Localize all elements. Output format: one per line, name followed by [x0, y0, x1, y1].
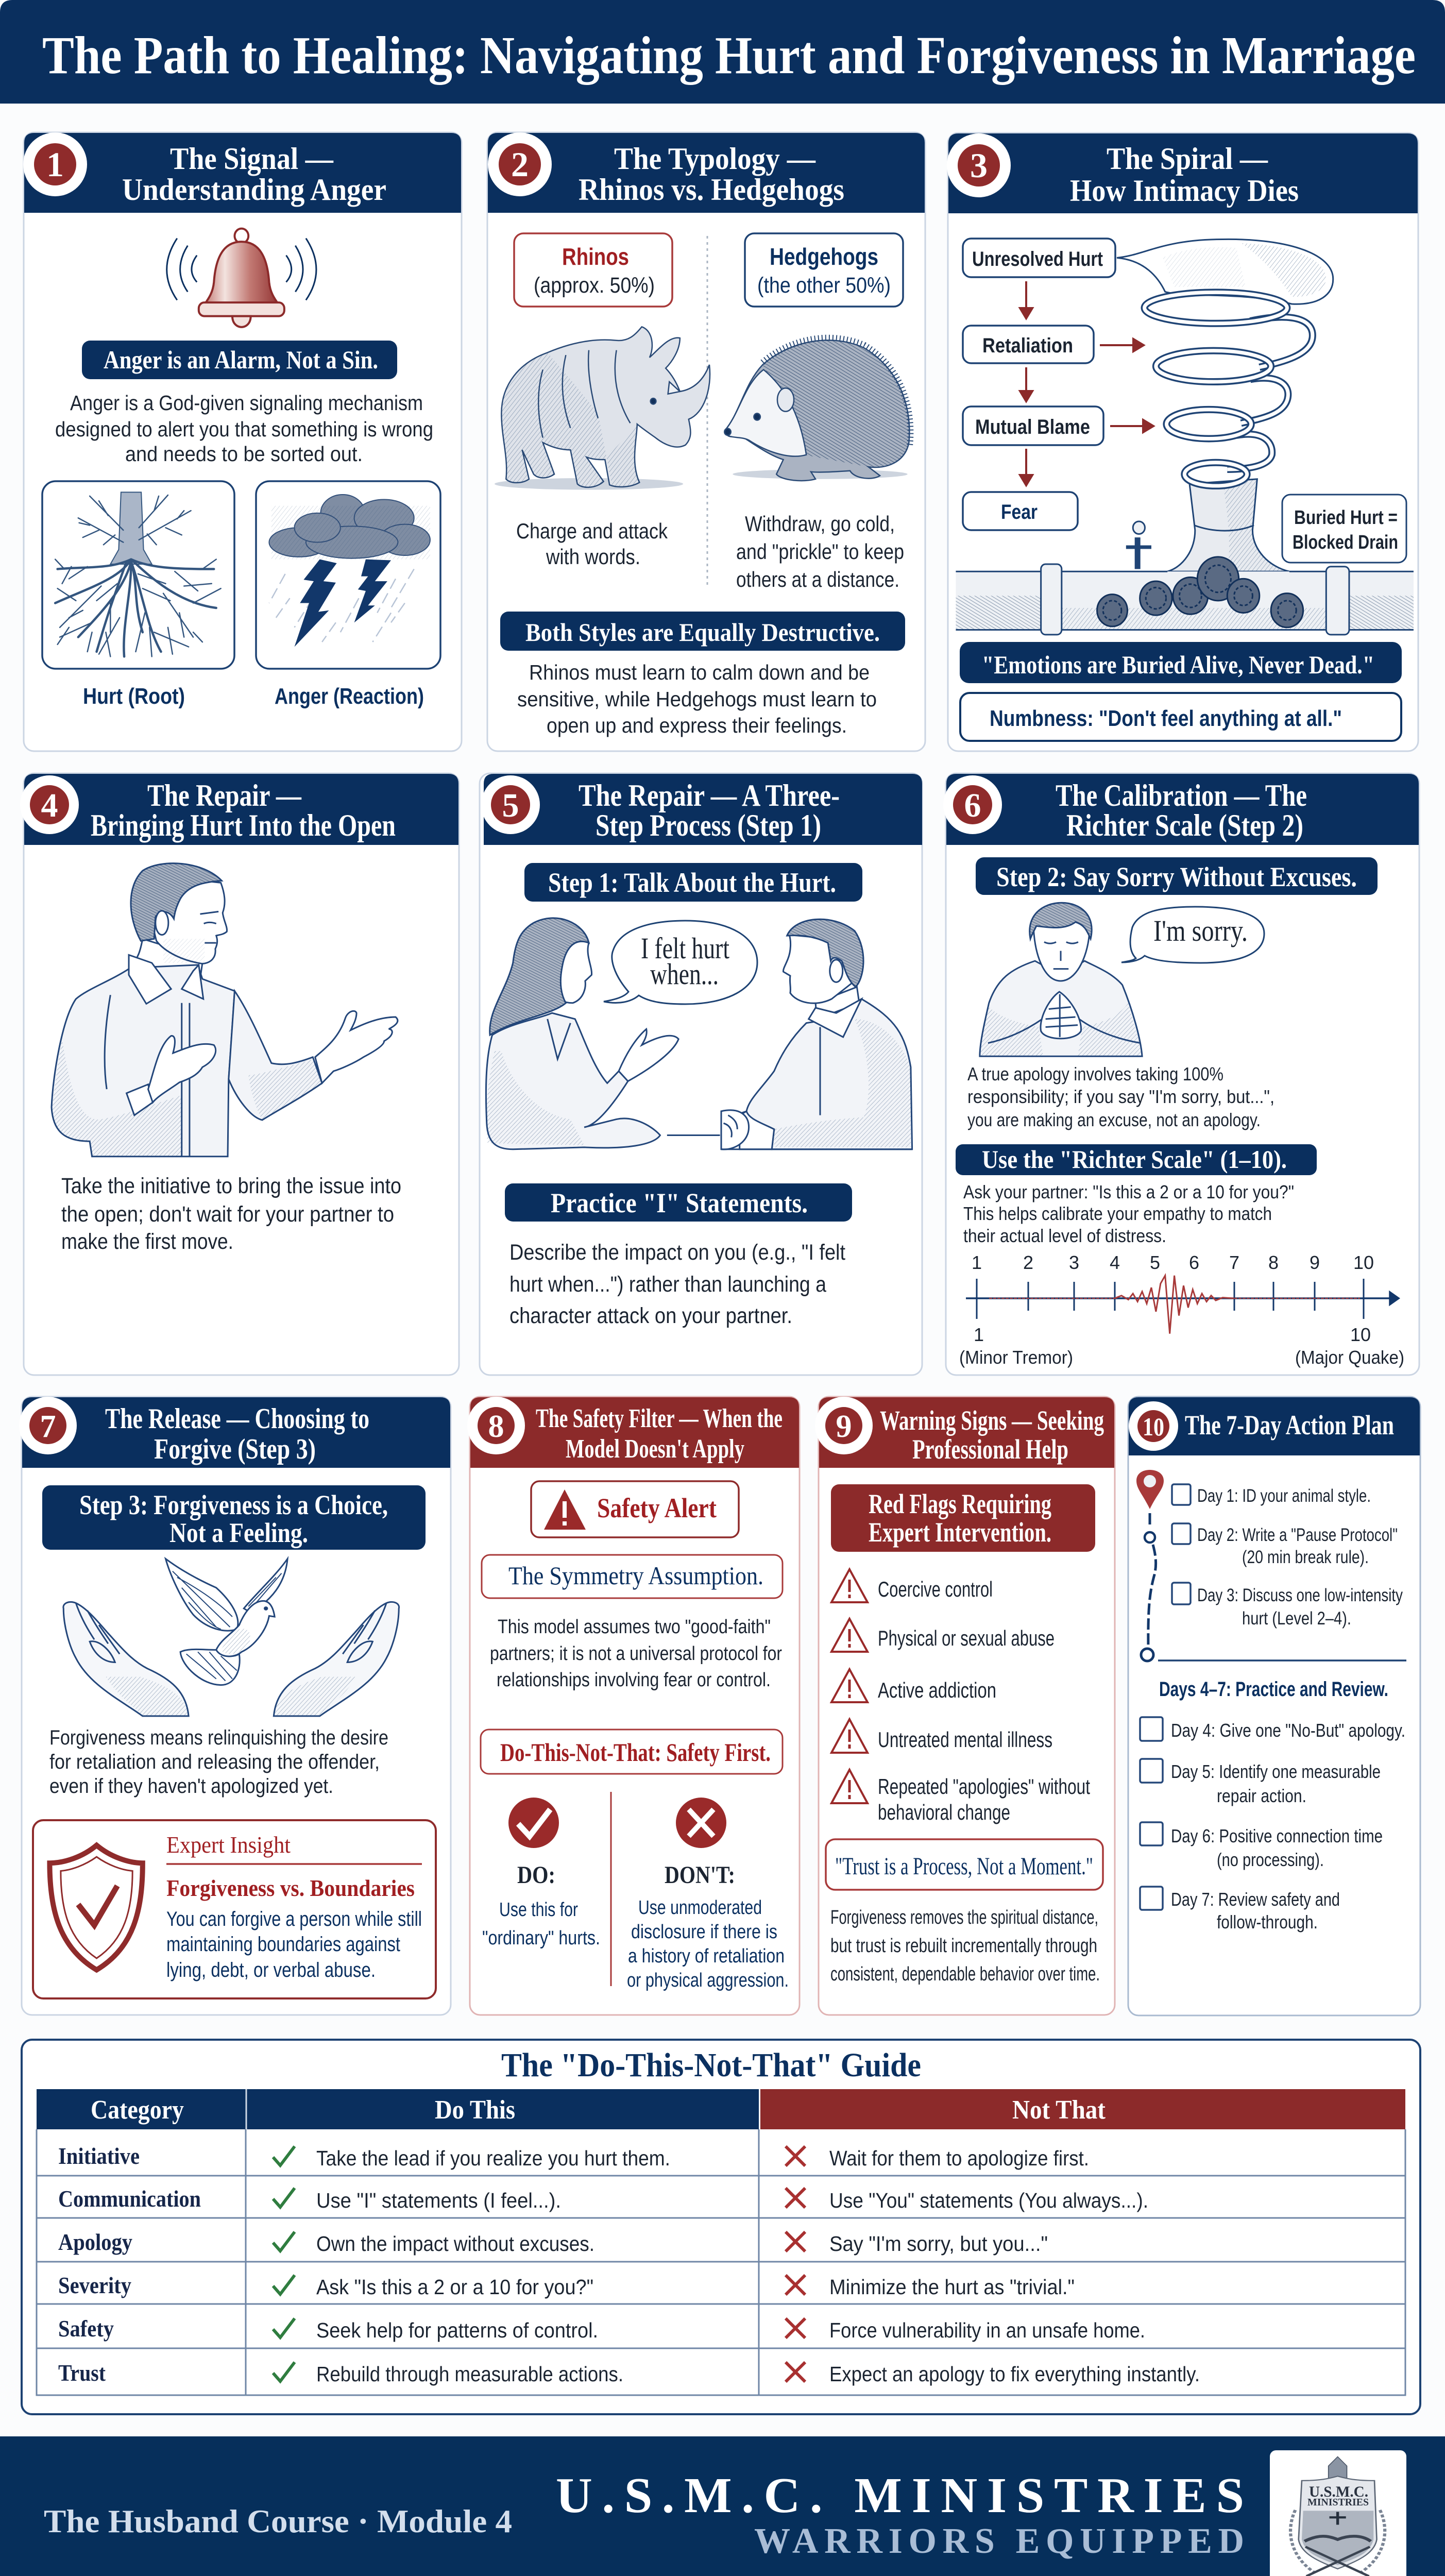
rule [1158, 1659, 1406, 1662]
label box: hedgehogs [745, 233, 903, 307]
text: anger description [55, 391, 433, 466]
callout: expert insight: You can forgive a person while still [166, 1908, 422, 1930]
panel 8 header [470, 1397, 799, 1468]
row: safety: Force vulnerability in an unsafe home. [829, 2318, 1145, 2342]
text: model assumes [490, 1616, 782, 1691]
row: apology [58, 2229, 1048, 2256]
checklist day 7: follow-through. [1217, 1911, 1318, 1933]
text: true apology: you are making an excuse, not an apology. [967, 1109, 1261, 1130]
callout: both styles [500, 612, 905, 651]
footer [0, 2436, 1445, 2576]
chart: richter scale: (Minor Tremor) [959, 1347, 1073, 1368]
label: buried hurt [1282, 495, 1406, 563]
checklist day 2: (20 min break rule). [1242, 1547, 1369, 1567]
dont column: or physical aggression. [627, 1970, 789, 1991]
row: trust: Rebuild through measurable actions. [316, 2362, 623, 2386]
row: communication [58, 2185, 1148, 2212]
dont column [627, 1861, 789, 1991]
text: forgiveness means: even if they haven't apologized yet. [49, 1775, 333, 1798]
chart: richter scale: 8 [1268, 1252, 1279, 1273]
text: ask your partner: This helps calibrate your empathy to match [963, 1203, 1272, 1224]
flag: mental illness [831, 1719, 1052, 1753]
callout: say sorry: Step 2: Say Sorry Without Excuses. [996, 861, 1357, 892]
flag: mental illness: Untreated mental illness [878, 1727, 1052, 1752]
guide heading: The "Do-This-Not-That" Guide [501, 2046, 921, 2084]
flag: active addiction: Active addiction [878, 1678, 996, 1702]
number badge 3 [947, 133, 1011, 197]
flag: repeated apologies [831, 1770, 1090, 1824]
do column: Use this for [499, 1899, 578, 1921]
flag: physical abuse: Physical or sexual abuse [878, 1626, 1055, 1650]
panel 4 header: The Repair — [147, 778, 302, 812]
callout: practice I statements: Practice "I" Statements. [551, 1188, 808, 1218]
row: initiative: Wait for them to apologize first. [829, 2146, 1089, 2170]
speech bubble: I felt hurt when: I felt hurt [641, 931, 729, 965]
number badge 10 [1129, 1401, 1178, 1451]
text: hedgehog behaviour: Withdraw, go cold, [745, 512, 895, 536]
label: hurt root: Hurt (Root) [83, 684, 185, 709]
row: apology: Apology [58, 2229, 132, 2255]
text: model assumes: relationships involving fear or control. [497, 1669, 771, 1691]
text: true apology [967, 1063, 1274, 1130]
callout: trust is a process: "Trust is a Process, Not a Moment." [835, 1853, 1093, 1880]
row: severity: Ask "Is this a 2 or a 10 for you?" [316, 2275, 593, 2299]
safety alert [531, 1481, 739, 1537]
text: both styles description: open up and express their feelings. [547, 714, 847, 737]
illustration: hands releasing dove [63, 1559, 399, 1716]
row: communication: Communication [58, 2185, 201, 2212]
chart: richter scale: 1 [972, 1252, 982, 1273]
icon: alarm bell [167, 229, 316, 327]
checklist day 5 [1140, 1759, 1381, 1806]
text: both styles description: sensitive, while Hedgehogs must learn to [517, 687, 877, 711]
chart: richter scale: 4 [1110, 1252, 1120, 1273]
chart: richter scale: (Major Quake) [1295, 1347, 1404, 1368]
flow: unresolved hurt: Unresolved Hurt [972, 248, 1103, 270]
label box: hedgehogs: Hedgehogs [770, 243, 878, 270]
callout: forgiveness is a choice: Step 3: Forgiveness is a Choice, [79, 1489, 388, 1520]
row: severity [58, 2272, 1075, 2299]
checklist day 1 [1172, 1484, 1371, 1506]
panel 6: the calibration [943, 773, 1419, 1375]
panel 1 header [24, 133, 461, 213]
illustration: man listening [721, 919, 912, 1149]
text: rhino behaviour [516, 519, 668, 569]
chart: richter scale: 10 [1353, 1252, 1374, 1273]
dont column: disclosure if there is [631, 1921, 777, 1943]
callout: anger is an alarm [82, 341, 397, 379]
number badge 3: 3 [970, 146, 988, 185]
row: trust: Trust [58, 2360, 106, 2386]
title banner [0, 0, 1445, 104]
row: initiative: Take the lead if you realize you hurt them. [316, 2146, 670, 2170]
panel 10: action plan [1128, 1397, 1420, 2015]
chart: richter scale: 9 [1310, 1252, 1320, 1273]
number badge 6 [943, 775, 1002, 834]
panel 5 header: The Repair — A Three- [579, 778, 840, 812]
callout: expert insight: Forgiveness vs. Boundaries [166, 1875, 415, 1901]
callout: red flags [831, 1484, 1095, 1552]
dont column: a history of retaliation [628, 1945, 785, 1967]
panel 7: the release [19, 1397, 451, 2015]
chart: richter scale: 6 [1189, 1252, 1199, 1273]
panel 2: the typology [487, 132, 925, 751]
panel 1 header: Understanding Anger [122, 173, 386, 207]
text: ask your partner: Ask your partner: "Is this a 2 or a 10 for you?" [963, 1181, 1294, 1202]
flow: retaliation [963, 326, 1094, 363]
panel 2 header: Rhinos vs. Hedgehogs [579, 173, 844, 207]
arrow: down [1020, 281, 1032, 318]
arrow: down [1020, 449, 1032, 485]
speech bubble: I felt hurt when: when... [650, 957, 719, 991]
text: forgiveness removes: consistent, dependable behavior over time. [830, 1963, 1100, 1985]
label box: rhinos [514, 233, 672, 307]
table header: Category [91, 2095, 184, 2125]
text: both styles description [517, 660, 877, 737]
panel 3 header: How Intimacy Dies [1070, 174, 1299, 208]
footer: course label: The Husband Course · Module 4 [44, 2503, 512, 2539]
speech bubble: I'm sorry [1121, 907, 1264, 963]
checklist day 2 [1172, 1523, 1398, 1567]
label box: hedgehogs: (the other 50%) [757, 273, 891, 298]
callout: forgiveness is a choice: Not a Feeling. [169, 1517, 308, 1548]
text: forgiveness removes [830, 1907, 1100, 1985]
logo badge: U.S.M.C. [1309, 2483, 1368, 2500]
text: anger description: and needs to be sorted out. [125, 442, 363, 466]
checklist day 3 [1172, 1583, 1403, 1629]
callout: talk about the hurt: Step 1: Talk About the Hurt. [548, 867, 836, 898]
flag: active addiction [831, 1669, 996, 1702]
callout: both styles: Both Styles are Equally Destructive. [525, 618, 880, 647]
flow: fear: Fear [1001, 501, 1038, 523]
do column: DO: [517, 1861, 555, 1889]
number badge 2: 2 [511, 145, 529, 184]
illustration: woman speaking [486, 918, 720, 1149]
panel 5: three-step process [480, 773, 922, 1375]
text: forgiveness removes: but trust is rebuilt incrementally through [830, 1935, 1097, 1957]
panel 8 header: The Safety Filter — When the [536, 1404, 783, 1433]
heading: do this not that: Do-This-Not-That: Safety First. [500, 1738, 771, 1767]
text: forgiveness removes: Forgiveness removes the spiritual distance, [830, 1907, 1098, 1928]
heading: symmetry assumption [482, 1555, 783, 1598]
checklist day 7: Day 7: Review safety and [1171, 1889, 1340, 1910]
chart: richter scale: 2 [1023, 1252, 1033, 1273]
table header [37, 2089, 1405, 2129]
panel 10 header [1129, 1397, 1420, 1455]
text: ask your partner [963, 1181, 1294, 1246]
divider [610, 1792, 612, 1986]
chart: richter scale: 5 [1150, 1252, 1160, 1273]
safety alert: Safety Alert [597, 1493, 717, 1523]
illustration: storm cloud [256, 481, 440, 669]
callout: numbness [960, 693, 1401, 741]
checklist day 6: (no processing). [1217, 1849, 1324, 1870]
row: apology: Say "I'm sorry, but you..." [829, 2232, 1048, 2256]
row: apology: Own the impact without excuses. [316, 2232, 594, 2256]
number badge 5 [481, 775, 540, 834]
number badge 2 [488, 132, 552, 196]
callout: forgiveness is a choice [42, 1485, 426, 1550]
panel 1 header: The Signal — [170, 142, 334, 176]
table header: Not That [1012, 2095, 1106, 2125]
do column: "ordinary" hurts. [482, 1927, 600, 1949]
chart: richter scale [959, 1252, 1404, 1368]
logo badge [1270, 2450, 1406, 2576]
dont column: DON'T: [665, 1861, 735, 1889]
flow: mutual blame: Mutual Blame [975, 416, 1090, 438]
arrow: to spiral [1110, 420, 1153, 432]
panel 6 header: Richter Scale (Step 2) [1066, 808, 1303, 842]
callout: expert insight: Expert Insight [166, 1832, 291, 1858]
text: describe the impact: Describe the impact on you (e.g., "I felt [509, 1240, 845, 1265]
callout: emotions buried alive: "Emotions are Buried Alive, Never Dead." [982, 650, 1374, 679]
text: true apology: A true apology involves taking 100% [967, 1063, 1223, 1084]
number badge 8 [467, 1397, 525, 1454]
heading: symmetry assumption: The Symmetry Assumption. [508, 1561, 763, 1590]
panel 4 header: Bringing Hurt Into the Open [91, 808, 396, 842]
flag: coercive control: Coercive control [878, 1577, 993, 1601]
row: trust [58, 2360, 1200, 2386]
text: describe the impact: hurt when...") rather than launching a [509, 1272, 826, 1297]
label box: rhinos: Rhinos [562, 243, 629, 270]
number badge 4 [20, 775, 79, 834]
row: communication: Use "You" statements (You always...). [829, 2189, 1148, 2212]
chart: richter scale: 1 [974, 1324, 984, 1345]
icon: shield with check [49, 1845, 143, 1970]
flow: unresolved hurt [963, 239, 1115, 277]
text: model assumes: This model assumes two "good-faith" [498, 1616, 771, 1638]
panel 3 header [948, 133, 1418, 213]
row: safety: Safety [58, 2315, 114, 2342]
text: model assumes: partners; it is not a universal protocol for [490, 1643, 782, 1665]
chart: richter scale: 3 [1069, 1252, 1079, 1273]
callout: expert insight: maintaining boundaries against [166, 1933, 400, 1956]
number badge 7: 7 [40, 1409, 56, 1444]
illustration: man gesturing [52, 863, 398, 1157]
text: take the initiative: make the first move. [61, 1229, 233, 1254]
number badge 9: 9 [836, 1409, 852, 1444]
panel 4 header [24, 774, 458, 845]
text: forgiveness means: Forgiveness means relinquishing the desire [49, 1726, 388, 1749]
panel 4: the repair [20, 773, 459, 1375]
heading: do this not that [481, 1730, 783, 1774]
checklist day 4 [1140, 1717, 1405, 1741]
number badge 9 [815, 1397, 873, 1454]
row: severity: Minimize the hurt as "trivial." [829, 2275, 1075, 2299]
text: rhino behaviour: Charge and attack [516, 519, 668, 543]
number badge 7 [19, 1397, 77, 1454]
panel 7 header: The Release — Choosing to [105, 1403, 369, 1435]
checklist day 5: repair action. [1217, 1785, 1306, 1806]
panel 2 header [488, 133, 925, 213]
arrow: to spiral [1100, 339, 1144, 351]
flow: fear [963, 492, 1078, 530]
callout: richter scale: Use the "Richter Scale" (1–10). [982, 1145, 1287, 1174]
panel 8: the safety filter [467, 1397, 800, 2015]
row: communication: Use "I" statements (I feel...). [316, 2189, 561, 2212]
text: true apology: responsibility; if you say "I'm sorry, but...", [967, 1086, 1274, 1107]
callout: anger is an alarm: Anger is an Alarm, Not a Sin. [104, 345, 378, 374]
text: hedgehog behaviour [736, 512, 904, 591]
panel 6 header: The Calibration — The [1056, 778, 1307, 812]
do column [482, 1861, 600, 1949]
callout: trust is a process [826, 1839, 1103, 1890]
checklist day 5: Day 5: Identify one measurable [1171, 1761, 1381, 1782]
text: forgiveness means: for retaliation and releasing the offender, [49, 1751, 380, 1773]
flag: repeated apologies: Repeated "apologies" without [878, 1774, 1090, 1799]
flag: coercive control [831, 1569, 993, 1602]
illustration: man apologizing [980, 903, 1142, 1056]
row: safety [58, 2315, 1145, 2342]
row: initiative: Initiative [58, 2143, 140, 2169]
speech bubble: I felt hurt when [604, 921, 757, 1004]
row: severity: Severity [58, 2272, 131, 2298]
text: ask your partner: their actual level of distress. [963, 1225, 1166, 1246]
number badge 10: 10 [1143, 1412, 1164, 1441]
chart: richter scale: 7 [1229, 1252, 1239, 1273]
checklist day 7 [1140, 1887, 1340, 1933]
divider [707, 236, 708, 586]
illustration: rhino [495, 327, 710, 490]
illustration: tree roots [42, 481, 234, 669]
callout: numbness: Numbness: "Don't feel anything at all." [990, 706, 1342, 731]
panel 1: the signal [23, 132, 462, 751]
checklist day 3: hurt (Level 2–4). [1242, 1608, 1351, 1629]
label: buried hurt: Blocked Drain [1293, 532, 1398, 553]
text: hedgehog behaviour: others at a distance. [736, 567, 899, 591]
flow: retaliation: Retaliation [982, 334, 1073, 357]
text: describe the impact: character attack on your partner. [509, 1303, 792, 1328]
panel 5 header [484, 774, 922, 845]
checklist day 1: Day 1: ID your animal style. [1197, 1486, 1371, 1506]
number badge 8: 8 [488, 1409, 504, 1444]
icon: dont cross [676, 1798, 726, 1848]
label: anger reaction: Anger (Reaction) [275, 684, 424, 709]
speech bubble: I'm sorry: I'm sorry. [1153, 914, 1248, 947]
arrow: down [1020, 367, 1032, 401]
table [37, 2089, 1405, 2395]
panel 9 header: Professional Help [912, 1434, 1068, 1465]
panel 7 header [22, 1397, 450, 1468]
panel 3 header: The Spiral — [1107, 142, 1268, 176]
checklist day 6: Day 6: Positive connection time [1171, 1825, 1383, 1846]
panel: do-this-not-that guide [22, 2040, 1420, 2414]
panel 5 header: Step Process (Step 1) [596, 808, 821, 842]
flow: mutual blame [963, 406, 1103, 445]
panel 3: the spiral [947, 133, 1418, 751]
number badge 1: 1 [46, 145, 64, 184]
number badge 6: 6 [964, 787, 981, 824]
text: describe the impact [509, 1240, 845, 1328]
flag: repeated apologies: behavioral change [878, 1800, 1010, 1824]
row: safety: Seek help for patterns of control. [316, 2318, 598, 2342]
panel 9: warning signs [815, 1397, 1115, 2015]
table header: Do This [435, 2095, 515, 2125]
number badge 4: 4 [41, 787, 58, 824]
text: take the initiative [61, 1174, 401, 1254]
panel 2 header: The Typology — [614, 142, 816, 176]
callout: practice I statements [505, 1183, 852, 1222]
callout: red flags: Expert Intervention. [869, 1517, 1051, 1548]
text: both styles description: Rhinos must learn to calm down and be [529, 660, 870, 684]
callout: expert insight: lying, debt, or verbal abuse. [166, 1959, 376, 1981]
illustration: spiral funnel and blocked pipe [956, 239, 1414, 635]
panel 9 header [819, 1397, 1114, 1468]
icon: do check [508, 1798, 559, 1848]
callout: red flags: Red Flags Requiring [869, 1488, 1051, 1519]
label box: rhinos: (approx. 50%) [534, 273, 655, 298]
number badge 5: 5 [502, 787, 519, 824]
text: anger description: designed to alert you that something is wrong [55, 417, 433, 441]
panel 9 header: Warning Signs — Seeking [880, 1405, 1104, 1436]
checklist day 2: Day 2: Write a "Pause Protocol" [1197, 1525, 1398, 1545]
text: take the initiative: Take the initiative to bring the issue into [61, 1174, 401, 1198]
text: hedgehog behaviour: and "prickle" to keep [736, 539, 904, 564]
panel 8 header: Model Doesn't Apply [566, 1434, 744, 1464]
footer: organization name: U.S.M.C. MINISTRIES [556, 2468, 1244, 2523]
text: take the initiative: the open; don't wait for your partner to [61, 1202, 394, 1227]
panel 6 header [946, 774, 1419, 845]
panel 7 header: Forgive (Step 3) [154, 1433, 316, 1465]
icon: map pin and path [1136, 1470, 1164, 1661]
chart: richter scale: 10 [1350, 1324, 1371, 1345]
text: anger description: Anger is a God-given signaling mechanism [70, 391, 423, 415]
text: forgiveness means [49, 1726, 388, 1798]
illustration: hedgehog [724, 338, 910, 481]
dont column: Use unmoderated [638, 1897, 762, 1919]
callout: emotions buried alive [960, 642, 1402, 683]
logo badge: MINISTRIES [1307, 2497, 1369, 2508]
footer: tagline: WARRIORS EQUIPPED [754, 2521, 1244, 2561]
flag: physical abuse [831, 1619, 1055, 1652]
row: initiative [58, 2143, 1089, 2170]
callout: expert insight [33, 1820, 436, 1998]
number badge 1 [23, 132, 87, 196]
label: buried hurt: Buried Hurt = [1294, 507, 1398, 529]
checklist day 6 [1140, 1822, 1383, 1870]
row: trust: Expect an apology to fix everything instantly. [829, 2362, 1200, 2386]
text: rhino behaviour: with words. [546, 545, 640, 569]
